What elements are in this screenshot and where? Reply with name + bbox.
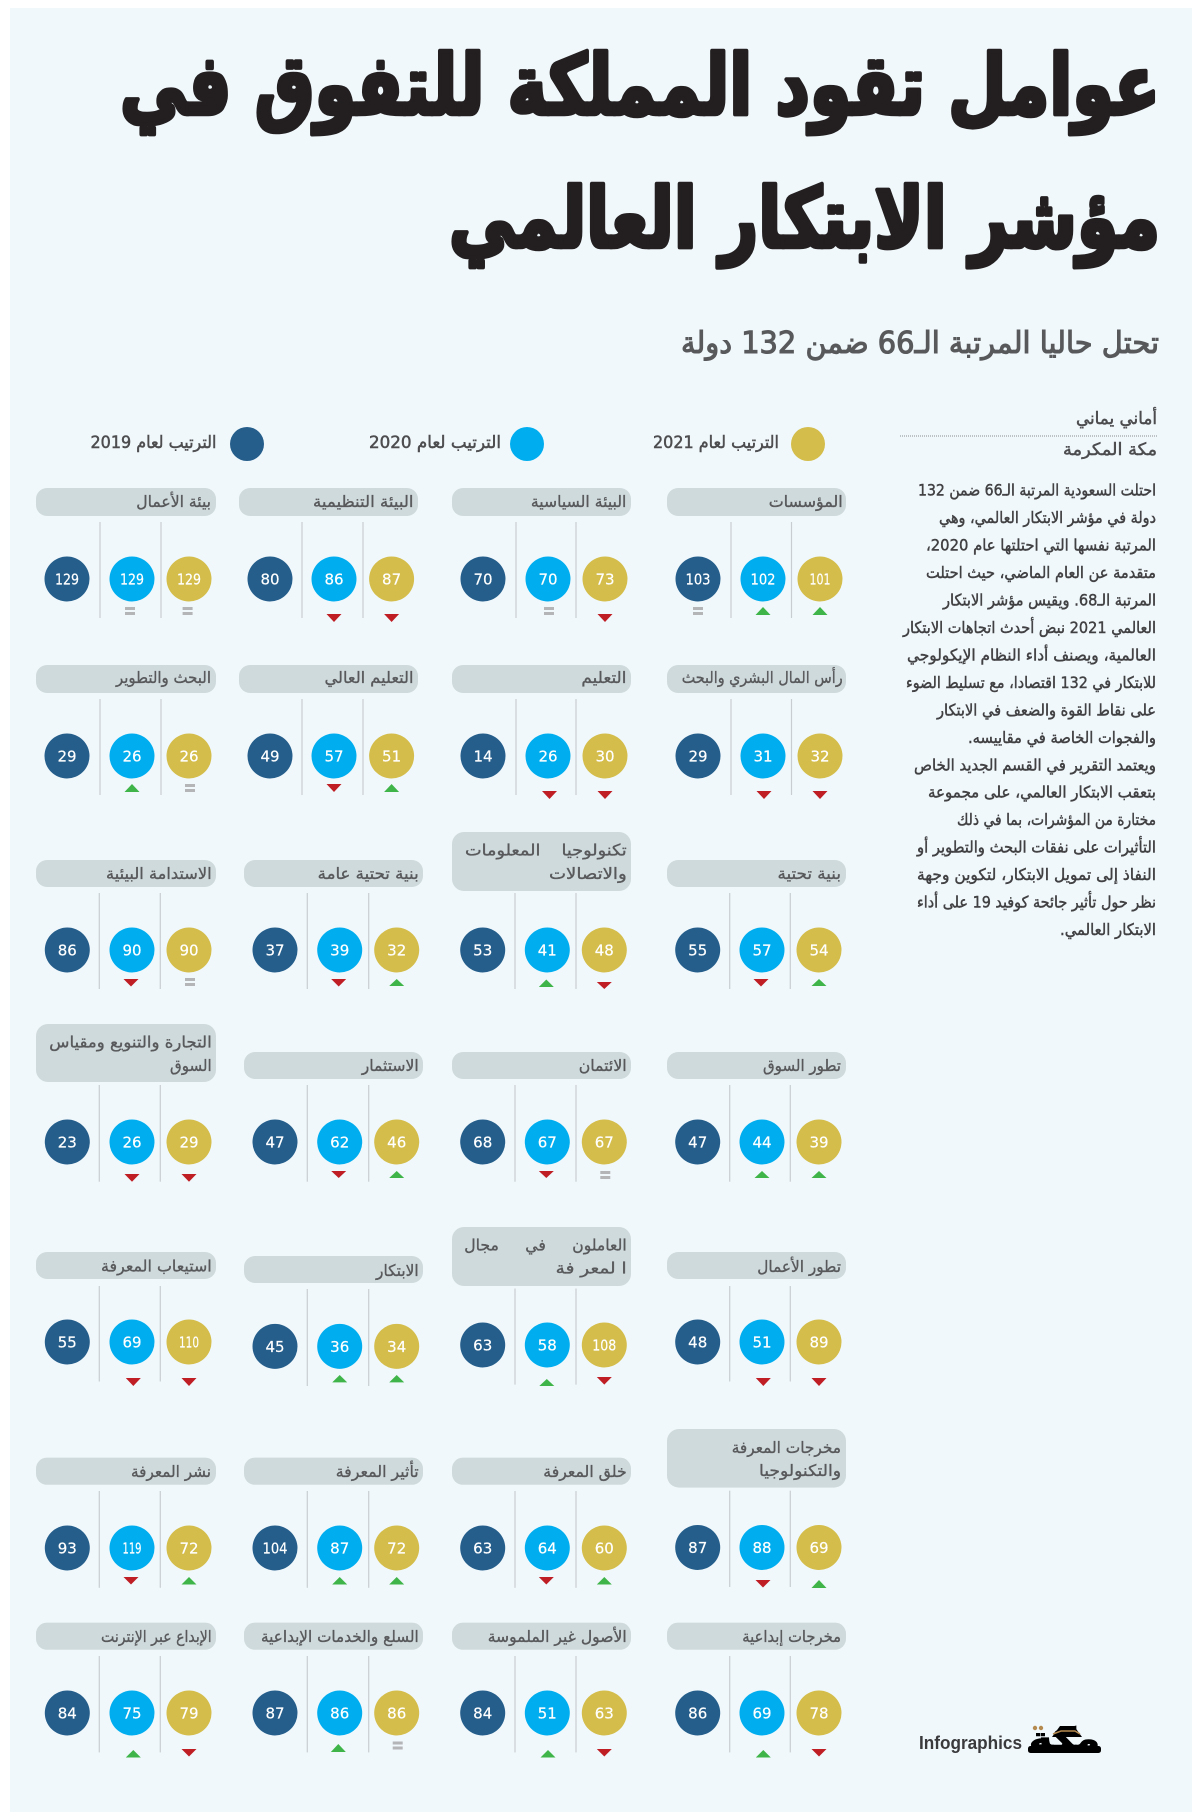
rank 2019: 104 — [262, 1540, 288, 1558]
rank 2019: 14 — [473, 748, 493, 766]
panel: مخرجات إبداعية — [667, 1623, 846, 1758]
label: السوق — [170, 1056, 212, 1076]
rank 2019: 23 — [58, 1134, 77, 1152]
label — [239, 665, 418, 693]
rank 2020: 58 — [538, 1336, 557, 1354]
rank 2021 — [582, 928, 627, 989]
label: مخرجات إبداعية — [742, 1627, 841, 1647]
rank 2020 — [525, 928, 570, 987]
rank 2019: 47 — [265, 1134, 285, 1152]
rank 2020 — [110, 928, 154, 986]
rank 2019 — [252, 1690, 298, 1736]
rank 2020: 51 — [538, 1704, 557, 1722]
label: الابتكار — [375, 1261, 419, 1281]
rank 2019 — [460, 1690, 505, 1736]
body text: التأثيرات على نفقات البحث والتطوير أو — [916, 836, 1156, 858]
label — [452, 1052, 631, 1079]
rank 2019 — [675, 1690, 720, 1736]
rank 2019: 63 — [473, 1336, 492, 1354]
rank 2019: 86 — [688, 1704, 707, 1722]
rank 2021: 86 — [387, 1704, 406, 1722]
panel: بنية تحتية — [667, 860, 846, 989]
rank 2021 — [369, 734, 414, 792]
rank 2021: 72 — [179, 1540, 199, 1558]
title — [120, 37, 1160, 268]
rank 2020 — [740, 1320, 784, 1386]
rank 2021 — [798, 556, 842, 615]
label: تأثير المعرفة — [336, 1460, 419, 1482]
rank 2019: 87 — [688, 1539, 707, 1557]
label: ا لمعر فة — [556, 1259, 627, 1279]
rank 2021: 72 — [387, 1540, 406, 1558]
rank 2019: 84 — [473, 1704, 492, 1722]
label — [36, 1458, 216, 1485]
label — [36, 665, 216, 693]
rank 2021 — [796, 1525, 842, 1588]
rank 2021 — [798, 734, 842, 799]
legend item 2020 — [369, 427, 544, 461]
panel: رأس المال البشري والبحث — [667, 665, 846, 799]
label: الائتمان — [579, 1056, 627, 1075]
panel: بيئة الأعمال — [36, 488, 216, 618]
rank 2020: 119 — [122, 1540, 142, 1558]
rank 2020 — [312, 734, 356, 792]
panel: التجارة والتنويع ومقياس السوق — [36, 1024, 216, 1182]
body text: والفجوات الخاصة في مقاييسه. — [968, 728, 1156, 748]
rank 2019: 80 — [260, 570, 280, 588]
label — [244, 1623, 423, 1650]
rank 2020 — [740, 734, 786, 799]
rank 2020 — [525, 1120, 570, 1178]
legend item 2019 — [90, 427, 264, 461]
label — [452, 1227, 631, 1286]
panel: نشر المعرفة — [36, 1458, 216, 1588]
rank 2019 — [460, 1120, 505, 1164]
rank 2021: 46 — [387, 1134, 406, 1152]
rank 2019 — [44, 734, 90, 778]
label: المؤسسات — [769, 492, 843, 512]
rank 2020 — [110, 1526, 154, 1584]
rank 2020: 26 — [122, 1134, 142, 1152]
icon: Makkah logo: مكة — [1029, 1722, 1100, 1757]
body text: نظر حول تأثير جائحة كوفيد 19 على أداء — [917, 891, 1156, 913]
rank 2021: 69 — [809, 1539, 829, 1557]
rank 2021: 90 — [179, 942, 199, 960]
rank 2019: 29 — [688, 748, 708, 766]
body text: على نقاط القوة والضعف في الابتكار — [936, 700, 1156, 720]
panel: استيعاب المعرفة — [36, 1252, 216, 1386]
body text: المرتبة نفسها التي احتلتها عام 2020، — [926, 536, 1156, 556]
rank 2019 — [252, 1120, 298, 1164]
rank 2019: 47 — [688, 1134, 707, 1152]
rank 2020: 69 — [122, 1334, 142, 1352]
rank 2019: 55 — [58, 1334, 77, 1352]
label: خلق المعرفة — [543, 1462, 627, 1482]
rank 2019: 68 — [473, 1134, 492, 1152]
rank 2020: 129 — [120, 570, 144, 588]
body text: المرتبة الـ68. ويقيس مؤشر الابتكار — [942, 590, 1156, 610]
label: استيعاب المعرفة — [101, 1257, 212, 1277]
rank 2019 — [248, 734, 292, 778]
panel: الاستثمار — [244, 1052, 423, 1182]
rank 2021 — [166, 1690, 212, 1756]
rank 2020: 64 — [538, 1540, 557, 1558]
rank 2020: 102 — [750, 570, 776, 588]
rank 2021: 54 — [809, 942, 829, 960]
rank 2020: 86 — [330, 1704, 349, 1722]
rank 2021: 51 — [382, 748, 401, 766]
label: بنية تحتية — [778, 864, 841, 883]
rank 2019: 103 — [686, 570, 710, 588]
rank 2020 — [525, 1322, 570, 1386]
rank 2019 — [45, 1120, 90, 1164]
label — [36, 1024, 216, 1082]
label: التعليم العالي — [324, 668, 414, 688]
label: رأس المال البشري والبحث — [682, 667, 843, 688]
label — [452, 1458, 631, 1485]
rank 2021: 110 — [179, 1334, 199, 1352]
body text: الابتكار العالمي. — [1060, 920, 1156, 940]
rank 2019 — [460, 1526, 505, 1570]
label: البيئة السياسية — [531, 492, 626, 511]
body text: بتعقب الابتكار العالمي، على مجموعة — [928, 783, 1156, 803]
rank 2019: 37 — [265, 942, 285, 960]
rank 2020 — [110, 1120, 154, 1182]
rank 2021: 108 — [592, 1336, 616, 1354]
rank 2019 — [45, 1690, 90, 1736]
label: بيئة الأعمال — [136, 491, 211, 511]
label: البيئة التنظيمية — [313, 492, 414, 511]
rank 2021: 87 — [382, 570, 401, 588]
rank 2019: 45 — [265, 1338, 285, 1356]
rank 2019 — [675, 928, 720, 972]
rank 2019 — [676, 556, 720, 615]
label — [667, 1623, 846, 1650]
rank 2020: 31 — [753, 748, 773, 766]
label — [36, 488, 216, 516]
legend item 2019: الترتيب لعام 2019 — [90, 433, 216, 453]
rank 2020: 86 — [324, 570, 344, 588]
panel: الأصول غير الملموسة — [452, 1623, 631, 1758]
rank 2019 — [460, 1322, 505, 1368]
rank 2021 — [582, 734, 628, 799]
rank 2021: 73 — [595, 570, 615, 588]
rank 2021 — [166, 1120, 212, 1182]
rank 2019: 29 — [57, 748, 77, 766]
rank 2020: 26 — [538, 748, 558, 766]
label: الاستدامة البيئية — [106, 864, 212, 883]
rank 2020 — [110, 734, 154, 792]
label: تطور الأعمال — [757, 1256, 841, 1277]
panel: مخرجات المعرفة والتكنولوجيا — [667, 1429, 846, 1588]
rank 2021 — [374, 1324, 419, 1382]
rank 2021: 39 — [809, 1134, 829, 1152]
label: الإبداع عبر الإنترنت — [101, 1627, 212, 1647]
panel: السلع والخدمات الإبداعية — [244, 1623, 423, 1752]
rank 2019 — [460, 556, 506, 602]
legend item 2021: الترتيب لعام 2021 — [653, 433, 779, 453]
rank 2019 — [675, 1525, 720, 1570]
rank 2021 — [374, 1526, 419, 1584]
label — [239, 488, 418, 516]
label — [36, 1252, 216, 1279]
rank 2020 — [110, 1320, 154, 1386]
rank 2021: 29 — [179, 1134, 199, 1152]
rank 2019: 49 — [260, 748, 280, 766]
label — [36, 860, 216, 887]
byline: أماني يماني — [1076, 407, 1157, 429]
label — [244, 1052, 423, 1079]
rank 2020: 88 — [752, 1539, 772, 1557]
rank 2020 — [526, 734, 570, 799]
rank 2019 — [45, 928, 90, 972]
label: بنية تحتية عامة — [318, 864, 419, 883]
credit: Infographics logo: Infographics — [919, 1733, 1022, 1753]
rank 2021 — [796, 1320, 842, 1386]
rank 2021: 60 — [595, 1540, 614, 1558]
rank 2021: 34 — [387, 1338, 406, 1356]
rank 2019: 48 — [688, 1334, 707, 1352]
label — [452, 488, 631, 516]
legend item 2021 — [653, 427, 825, 461]
rank 2021 — [166, 1526, 212, 1584]
rank 2020 — [110, 1690, 154, 1758]
rank 2021: 101 — [810, 570, 830, 588]
panel: تطور السوق — [667, 1052, 846, 1182]
label: البحث والتطوير — [115, 668, 211, 688]
rank 2020: 69 — [752, 1704, 772, 1722]
credit: Infographics logo — [919, 1722, 1101, 1757]
rank 2019 — [252, 928, 298, 972]
rank 2020: 62 — [330, 1134, 349, 1152]
label — [244, 1458, 423, 1485]
label: التجارة والتنويع ومقياس — [49, 1033, 212, 1053]
rank 2021 — [582, 1322, 627, 1385]
rank 2021: 32 — [810, 748, 830, 766]
body text: مختارة من المؤشرات، بما في ذلك — [957, 810, 1156, 830]
label — [667, 488, 846, 516]
rank 2019: 55 — [688, 942, 707, 960]
rank 2020 — [525, 1526, 570, 1584]
rank 2019 — [675, 1120, 720, 1164]
rank 2020: 57 — [752, 942, 772, 960]
rank 2019: 87 — [265, 1704, 285, 1722]
rank 2020: 70 — [538, 570, 558, 588]
panel: تكنولوجيا المعلومات والاتصالات — [452, 832, 631, 989]
body text — [902, 481, 1156, 940]
body text: متقدمة عن العام الماضي، حيث احتلت — [926, 563, 1156, 583]
rank 2021: 79 — [179, 1704, 199, 1722]
label — [667, 665, 846, 693]
rank 2019: 93 — [58, 1540, 77, 1558]
body text: العالمية، ويصنف أداء النظام الإيكولوجي — [907, 644, 1156, 666]
label — [667, 1429, 846, 1488]
rank 2020 — [317, 1690, 362, 1752]
byline: مكة المكرمة — [1063, 440, 1157, 460]
label: التعليم — [581, 668, 626, 687]
rank 2021 — [582, 1690, 627, 1756]
body text: للابتكار في 132 اقتصادا، مع تسليط الضوء — [906, 673, 1156, 693]
panel: التعليم العالي — [239, 665, 418, 795]
label — [667, 1052, 846, 1079]
legend — [90, 427, 825, 461]
rank 2021 — [374, 1690, 419, 1750]
panel: البحث والتطوير — [36, 665, 216, 795]
rank 2021 — [166, 734, 212, 792]
rank 2020: 26 — [122, 748, 142, 766]
panel: الإبداع عبر الإنترنت — [36, 1623, 216, 1758]
rank 2019 — [460, 928, 505, 972]
panel: خلق المعرفة — [452, 1458, 631, 1588]
byline — [900, 407, 1157, 460]
panel: الابتكار — [244, 1256, 423, 1386]
rank 2020: 67 — [538, 1134, 557, 1152]
label: نشر المعرفة — [131, 1462, 211, 1482]
rank 2021 — [166, 556, 212, 615]
body text: ويعتمد التقرير في القسم الجديد الخاص — [914, 755, 1156, 775]
label — [667, 1252, 846, 1279]
rank 2020 — [740, 928, 784, 986]
rank 2021: 30 — [595, 748, 615, 766]
body text: احتلت السعودية المرتبة الـ66 ضمن 132 — [918, 481, 1156, 501]
rank 2020 — [312, 556, 356, 622]
panel: الاستدامة البيئية — [36, 860, 216, 989]
rank 2020: 90 — [122, 942, 142, 960]
label: السلع والخدمات الإبداعية — [261, 1627, 419, 1647]
label — [452, 832, 631, 891]
rank 2020: 39 — [330, 942, 349, 960]
label: الأصول غير الملموسة — [488, 1626, 627, 1647]
rank 2021 — [796, 1120, 842, 1178]
rank 2021: 26 — [179, 748, 199, 766]
panel: التعليم — [452, 665, 631, 799]
rank 2019: 86 — [58, 942, 77, 960]
label — [452, 665, 631, 693]
rank 2019 — [676, 734, 720, 778]
label: الاستثمار — [361, 1056, 419, 1076]
rank 2021 — [166, 928, 212, 986]
rank 2019: 129 — [55, 570, 79, 588]
rank 2019 — [248, 556, 292, 602]
rank 2020 — [740, 1120, 784, 1178]
panel: العاملون في مجال المعرفة — [452, 1227, 631, 1386]
rank 2019: 70 — [473, 570, 493, 588]
rank 2021: 78 — [809, 1704, 829, 1722]
rank 2021 — [374, 1120, 419, 1178]
label — [244, 860, 423, 887]
panel: البيئة التنظيمية — [239, 488, 418, 622]
rank 2021: 89 — [809, 1334, 829, 1352]
rank 2019 — [252, 1324, 298, 1369]
rank 2021: 67 — [595, 1134, 614, 1152]
rank 2019 — [675, 1320, 720, 1364]
rank 2021: 32 — [387, 942, 406, 960]
label: تكنولوجيا المعلومات — [465, 840, 627, 860]
rank 2020 — [525, 1690, 570, 1758]
rank 2021 — [582, 1526, 627, 1584]
rank 2020 — [317, 1324, 362, 1382]
rank 2020: 44 — [752, 1134, 772, 1152]
label: مخرجات المعرفة — [732, 1438, 841, 1458]
rank 2021 — [582, 1120, 627, 1179]
subtitle: تحتل حاليا المرتبة الـ66 ضمن 132 دولة — [681, 326, 1159, 361]
rank 2020 — [740, 556, 786, 615]
rank 2019 — [460, 734, 506, 778]
panel: تأثير المعرفة — [244, 1458, 423, 1588]
rank 2019: 53 — [473, 942, 492, 960]
rank 2019 — [45, 1320, 90, 1364]
label: تطور السوق — [763, 1056, 841, 1076]
rank 2019: 84 — [58, 1704, 77, 1722]
label — [36, 1623, 216, 1650]
rank 2020 — [526, 556, 570, 615]
rank 2020 — [317, 1120, 362, 1178]
rank 2019 — [252, 1526, 298, 1570]
rank 2020 — [317, 1526, 362, 1584]
rank 2021: 129 — [177, 570, 201, 588]
rank 2020: 36 — [330, 1338, 349, 1356]
rank 2019 — [44, 556, 90, 602]
label: والتكنولوجيا — [759, 1461, 841, 1481]
rank 2020: 41 — [538, 942, 557, 960]
body text: العالمي 2021 نبض أحدث اتجاهات الابتكار — [902, 617, 1156, 638]
rank 2020: 57 — [324, 748, 344, 766]
rank 2020: 51 — [752, 1334, 772, 1352]
legend item 2020: الترتيب لعام 2020 — [369, 433, 501, 453]
rank 2020: 75 — [122, 1704, 142, 1722]
panel: تطور الأعمال — [667, 1252, 846, 1386]
label — [667, 860, 846, 887]
rank 2020 — [317, 928, 362, 986]
rank 2021 — [796, 1690, 842, 1756]
rank 2021 — [374, 928, 419, 986]
rank 2020 — [110, 556, 154, 615]
rank 2021 — [582, 556, 628, 622]
rank 2020: 87 — [330, 1540, 349, 1558]
rank 2020 — [740, 1525, 784, 1588]
panel: المؤسسات — [667, 488, 846, 618]
label: العاملون في مجال — [464, 1236, 627, 1256]
rank 2021: 63 — [595, 1704, 614, 1722]
rank 2021 — [369, 556, 414, 622]
rank 2019 — [45, 1526, 90, 1570]
label — [452, 1623, 631, 1650]
rank 2021: 48 — [595, 942, 614, 960]
panel: بنية تحتية عامة — [244, 860, 423, 989]
body text: النفاذ إلى تمويل الابتكار، لتكوين وجهة — [917, 865, 1156, 885]
label: والاتصالات — [549, 864, 627, 884]
rank 2021 — [166, 1320, 212, 1386]
panel: البيئة السياسية — [452, 488, 631, 622]
panel: الائتمان — [452, 1052, 631, 1182]
body text: دولة في مؤشر الابتكار العالمي، وهي — [939, 508, 1156, 528]
rank 2020 — [740, 1690, 784, 1758]
rank 2019: 63 — [473, 1540, 492, 1558]
rank 2021 — [796, 928, 842, 986]
label — [244, 1256, 423, 1283]
